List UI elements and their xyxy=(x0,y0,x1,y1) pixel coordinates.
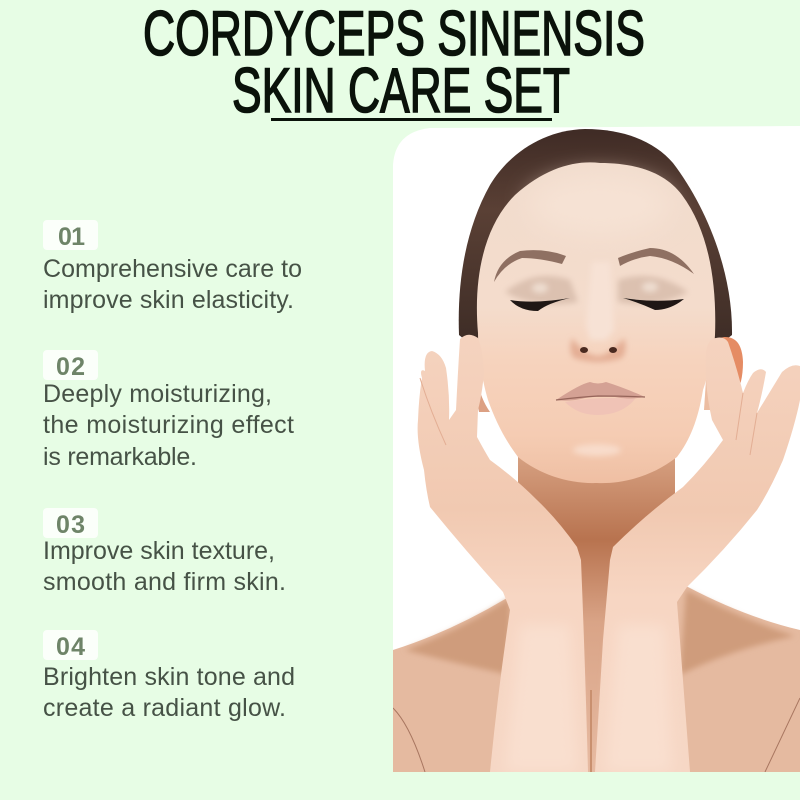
nose bridge highlight xyxy=(587,266,613,340)
benefit 02 text xyxy=(43,380,294,471)
benefit 04 text: create a radiant glow. xyxy=(43,694,286,722)
benefit 04 text xyxy=(43,663,295,722)
benefit 01 text: Comprehensive care to xyxy=(43,255,302,283)
benefit 03 text: smooth and firm skin. xyxy=(43,568,286,596)
illustration: woman portrait xyxy=(393,129,800,772)
number badge 02 xyxy=(43,350,98,381)
number badge 04: 04 xyxy=(56,633,85,661)
collarbone lines xyxy=(393,698,800,772)
benefit 02 text: the moisturizing effect xyxy=(43,411,294,439)
chin highlight xyxy=(573,444,621,456)
benefit 04 text: Brighten skin tone and xyxy=(43,663,295,691)
benefit 01 xyxy=(43,220,302,314)
ear right lobe xyxy=(704,380,710,410)
benefit 04 xyxy=(43,630,295,722)
eye right xyxy=(623,298,684,310)
right finger lines xyxy=(736,393,757,455)
right hand and forearm xyxy=(595,338,800,772)
number badge 03: 03 xyxy=(56,511,85,539)
benefit 03 text xyxy=(43,537,286,596)
nose xyxy=(570,338,626,362)
benefit 01 text xyxy=(43,255,302,314)
eyelid highlight right xyxy=(642,282,658,292)
number badge 01: 01 xyxy=(58,223,85,251)
shoulders xyxy=(393,586,800,772)
upper lip xyxy=(556,382,645,401)
benefit 03 text: Improve skin texture, xyxy=(43,537,275,565)
number badge 02: 02 xyxy=(56,353,85,381)
number badge 01 xyxy=(43,220,98,251)
panel: benefit list xyxy=(43,220,302,722)
eyebrow left xyxy=(494,250,566,282)
benefit 02 text: is remarkable. xyxy=(43,443,197,471)
eyebrow right xyxy=(618,248,694,274)
left hand and forearm xyxy=(418,335,588,772)
lower lip xyxy=(565,398,635,415)
shoulder shadow left xyxy=(405,598,510,675)
white photo backdrop xyxy=(393,126,800,772)
forehead glow xyxy=(516,156,684,198)
title line 2: SKIN CARE SET xyxy=(232,56,570,126)
number badge 03 xyxy=(43,508,98,539)
eye left xyxy=(510,298,570,311)
title underline xyxy=(271,118,552,121)
eye socket shadow left xyxy=(505,276,578,304)
left finger lines xyxy=(420,378,446,445)
nostrils xyxy=(580,347,617,353)
left forearm highlight xyxy=(512,628,572,766)
number badge 04 xyxy=(43,630,98,661)
neck xyxy=(518,457,675,724)
eye socket shadow right xyxy=(618,276,688,304)
hair xyxy=(459,129,732,360)
shoulder shadow right xyxy=(680,590,795,675)
eyelid highlight left xyxy=(532,283,548,293)
cleavage line xyxy=(590,690,592,772)
benefit 02 xyxy=(43,350,294,471)
benefit 03 xyxy=(43,508,286,596)
ear right xyxy=(720,337,743,383)
lip line xyxy=(556,396,645,400)
panel: portrait photo xyxy=(393,126,800,772)
right forearm highlight xyxy=(612,628,666,766)
face xyxy=(477,162,715,483)
benefit 01 text: improve skin elasticity. xyxy=(43,286,294,314)
benefit 02 text: Deeply moisturizing, xyxy=(43,380,272,408)
title xyxy=(143,0,645,126)
ear left lobe xyxy=(478,394,490,412)
